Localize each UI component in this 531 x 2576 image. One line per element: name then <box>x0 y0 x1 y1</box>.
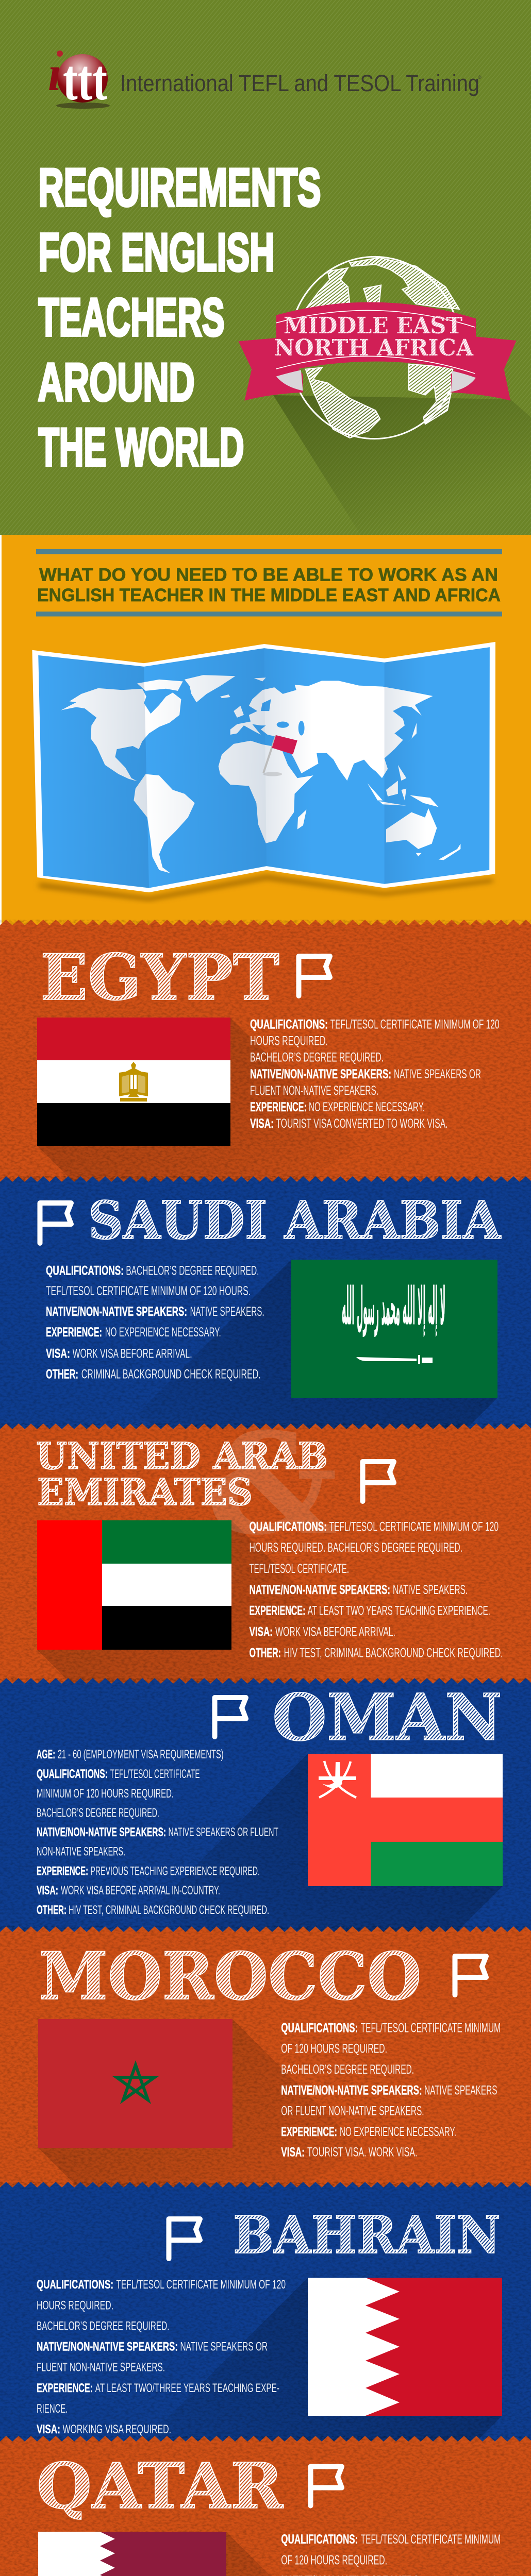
requirements: Oman: TEFL/TESOL CERTIFICATE <box>110 1767 200 1781</box>
Oman national flag <box>308 1754 503 1886</box>
requirements: Bahrain: FLUENT NON-NATIVE SPEAKERS. <box>37 2361 165 2375</box>
heading: Oman: OMAN <box>272 1680 502 1755</box>
requirements: United Arab Emirates: NATIVE/NON-NATIVE SPEAKERS: <box>250 1583 390 1597</box>
requirements: Bahrain: BACHELOR’S DEGREE REQUIRED. <box>37 2319 169 2333</box>
requirements: Bahrain: QUALIFICATIONS: <box>37 2278 113 2292</box>
requirements: Saudi Arabia: TEFL/TESOL CERTIFICATE MINIMUM OF 120 HOURS. <box>46 1284 251 1298</box>
panel: Egypt <box>0 920 531 1275</box>
heading: Saudi Arabia: SAUDI ARABIA <box>88 1190 502 1251</box>
continents <box>61 675 460 873</box>
requirements: Bahrain <box>37 2278 286 2436</box>
requirements: Morocco: NO EXPERIENCE NECESSARY. <box>340 2125 456 2139</box>
requirements: Oman: WORK VISA BEFORE ARRIVAL IN-COUNTRY. <box>61 1884 220 1897</box>
icon: flag <box>363 1462 394 1501</box>
requirements: Egypt: EXPERIENCE: <box>250 1100 307 1114</box>
requirements: Saudi Arabia: EXPERIENCE: <box>46 1325 102 1340</box>
requirements: Oman: PREVIOUS TEACHING EXPERIENCE REQUIRED. <box>90 1864 260 1878</box>
heading: United Arab Emirates: UNITED ARAB <box>36 1434 328 1478</box>
requirements: Oman: NATIVE/NON-NATIVE SPEAKERS: <box>37 1825 166 1839</box>
requirements: Saudi Arabia: CRIMINAL BACKGROUND CHECK REQUIRED. <box>81 1367 261 1382</box>
requirements: Oman: MINIMUM OF 120 HOURS REQUIRED. <box>37 1787 174 1801</box>
requirements: Morocco: EXPERIENCE: <box>281 2125 337 2139</box>
heading: what do you need: WHAT DO YOU NEED TO BE ABLE TO WORK AS AN <box>39 565 498 585</box>
requirements: Oman: QUALIFICATIONS: <box>37 1767 108 1781</box>
panel: Saudi Arabia <box>0 1176 531 1552</box>
heading: what do you need: ENGLISH TEACHER IN THE MIDDLE EAST AND AFRICA <box>37 585 501 605</box>
requirements: Oman: BACHELOR’S DEGREE REQUIRED. <box>37 1806 159 1820</box>
requirements: United Arab Emirates: EXPERIENCE: <box>250 1604 305 1618</box>
requirements: Morocco: VISA: <box>281 2145 305 2160</box>
requirements: Oman: NATIVE SPEAKERS OR FLUENT <box>168 1825 278 1839</box>
requirements: Morocco: NATIVE/NON-NATIVE SPEAKERS: <box>281 2083 422 2097</box>
requirements: Bahrain: NATIVE/NON-NATIVE SPEAKERS: <box>37 2340 178 2354</box>
requirements: Saudi Arabia <box>46 1263 264 1382</box>
requirements: Bahrain: RIENCE. <box>37 2402 68 2416</box>
heading: United Arab Emirates <box>36 1434 328 1514</box>
icon: flag <box>40 1203 71 1243</box>
requirements: Oman: VISA: <box>37 1884 58 1897</box>
requirements: Qatar: QUALIFICATIONS: <box>281 2532 358 2547</box>
heading: Morocco: MOROCCO <box>39 1938 422 2014</box>
Saudi Arabia national flag <box>291 1260 497 1398</box>
UAE national flag <box>37 1520 231 1650</box>
requirements: Morocco: QUALIFICATIONS: <box>281 2021 358 2035</box>
requirements: United Arab Emirates: OTHER: <box>250 1646 281 1660</box>
requirements: Egypt: NO EXPERIENCE NECESSARY. <box>309 1100 425 1114</box>
title: requirements for English teachers around the world: REQUIREMENTS <box>38 158 321 217</box>
requirements: Bahrain: NATIVE SPEAKERS OR <box>180 2340 268 2354</box>
requirements: Saudi Arabia: NATIVE/NON-NATIVE SPEAKERS: <box>46 1304 187 1319</box>
requirements: Oman: OTHER: <box>37 1903 67 1917</box>
logo: ITTT International TEFL and TESOL Training: © <box>478 75 482 80</box>
requirements: Morocco: OF 120 HOURS REQUIRED. <box>281 2042 387 2056</box>
panel: Morocco <box>0 1926 531 2277</box>
requirements: United Arab Emirates <box>250 1519 503 1660</box>
requirements: Morocco: TOURIST VISA. WORK VISA. <box>307 2145 417 2160</box>
requirements: Oman: HIV TEST, CRIMINAL BACKGROUND CHECK REQUIRED. <box>69 1903 269 1917</box>
requirements: Egypt: FLUENT NON-NATIVE SPEAKERS. <box>250 1083 378 1098</box>
requirements: Egypt: BACHELOR’S DEGREE REQUIRED. <box>250 1050 384 1065</box>
title: requirements for English teachers around the world: THE WORLD <box>38 417 244 477</box>
requirements: Saudi Arabia: QUALIFICATIONS: <box>46 1263 124 1278</box>
requirements: Saudi Arabia: NATIVE SPEAKERS. <box>190 1304 264 1319</box>
requirements: Bahrain: VISA: <box>37 2422 60 2436</box>
requirements: United Arab Emirates: WORK VISA BEFORE ARRIVAL. <box>275 1625 395 1639</box>
requirements: Bahrain: WORKING VISA REQUIRED. <box>63 2422 171 2436</box>
globe with Middle East North Africa ribbon: MIDDLE EAST <box>284 313 462 339</box>
panel: United Arab Emirates <box>0 1402 531 1778</box>
requirements: Saudi Arabia: NO EXPERIENCE NECESSARY. <box>105 1325 221 1340</box>
requirements: Oman: 21 - 60 (EMPLOYMENT VISA REQUIREMENTS) <box>58 1748 224 1761</box>
requirements: Egypt: QUALIFICATIONS: <box>250 1017 328 1031</box>
heading: Qatar: QATAR <box>37 2449 284 2523</box>
requirements: Egypt <box>250 1017 500 1131</box>
globe with Middle East North Africa ribbon: NORTH AFRICA <box>274 335 474 361</box>
requirements: Saudi Arabia: VISA: <box>46 1347 70 1361</box>
requirements: United Arab Emirates: QUALIFICATIONS: <box>250 1519 327 1534</box>
requirements: Saudi Arabia: OTHER: <box>46 1367 78 1382</box>
logo: ITTT International TEFL and TESOL Training: International TEFL and TESOL Training <box>120 70 479 96</box>
logo: ITTT International TEFL and TESOL Training <box>48 46 482 112</box>
requirements: Bahrain: TEFL/TESOL CERTIFICATE MINIMUM OF 120 <box>116 2278 286 2292</box>
panel: title header <box>0 0 531 535</box>
requirements: Bahrain: AT LEAST TWO/THREE YEARS TEACHING EXPE- <box>95 2381 279 2395</box>
Bahrain national flag <box>308 2278 502 2416</box>
requirements: Morocco: OR FLUENT NON-NATIVE SPEAKERS. <box>281 2104 424 2119</box>
requirements: Oman: EXPERIENCE: <box>37 1864 88 1878</box>
title: requirements for English teachers around the world: AROUND <box>38 352 195 412</box>
heading: Egypt: EGYPT <box>40 941 279 1015</box>
title: requirements for English teachers around the world <box>38 158 321 477</box>
folded world map <box>32 642 495 902</box>
requirements: Saudi Arabia: BACHELOR’S DEGREE REQUIRED. <box>126 1263 259 1278</box>
requirements: Morocco <box>281 2021 501 2160</box>
requirements: Qatar <box>281 2532 501 2576</box>
requirements: United Arab Emirates: TEFL/TESOL CERTIFICATE. <box>250 1562 349 1576</box>
icon: flag <box>214 1698 246 1737</box>
requirements: Egypt: NATIVE/NON-NATIVE SPEAKERS: <box>250 1067 391 1081</box>
watermark ampersand: & <box>206 1402 339 1566</box>
Morocco national flag <box>38 2019 233 2148</box>
heading: United Arab Emirates: EMIRATES <box>37 1470 253 1514</box>
icon: flag <box>299 956 330 996</box>
panel: Bahrain <box>0 2182 531 2570</box>
Egypt national flag <box>37 1018 230 1146</box>
heading: Bahrain: BAHRAIN <box>233 2205 501 2265</box>
fold shading <box>38 647 490 888</box>
requirements: Oman <box>37 1748 278 1917</box>
requirements: Oman: NON-NATIVE SPEAKERS. <box>37 1844 125 1859</box>
requirements: Egypt: HOURS REQUIRED. <box>250 1034 328 1048</box>
panel: Oman <box>0 1678 531 2041</box>
title: requirements for English teachers around the world: FOR ENGLISH <box>38 223 274 282</box>
title: requirements for English teachers around the world: TEACHERS <box>38 287 225 347</box>
requirements: Oman: AGE: <box>37 1748 55 1761</box>
logo: ITTT International TEFL and TESOL Training: ı <box>48 46 61 101</box>
panel: world map intro <box>0 535 531 926</box>
panel: Qatar <box>0 2436 531 2576</box>
globe with Middle East North Africa ribbon <box>238 257 531 535</box>
heading: what do you need <box>36 549 502 616</box>
requirements: Bahrain: EXPERIENCE: <box>37 2381 93 2395</box>
requirements: Bahrain: HOURS REQUIRED. <box>37 2298 113 2312</box>
requirements: Saudi Arabia: WORK VISA BEFORE ARRIVAL. <box>73 1347 192 1361</box>
Qatar national flag <box>38 2532 226 2576</box>
requirements: United Arab Emirates: VISA: <box>250 1625 273 1639</box>
requirements: United Arab Emirates: NATIVE SPEAKERS. <box>393 1583 468 1597</box>
icon: flag <box>310 2467 342 2506</box>
requirements: Qatar: OF 120 HOURS REQUIRED. <box>281 2553 387 2568</box>
requirements: Morocco: BACHELOR’S DEGREE REQUIRED. <box>281 2062 414 2077</box>
icon: flag <box>455 1956 486 1995</box>
logo: ITTT International TEFL and TESOL Training: ttt <box>63 48 107 112</box>
pin flag on the Middle East <box>263 735 297 776</box>
requirements: Egypt: VISA: <box>250 1116 274 1131</box>
icon: flag <box>169 2219 200 2259</box>
